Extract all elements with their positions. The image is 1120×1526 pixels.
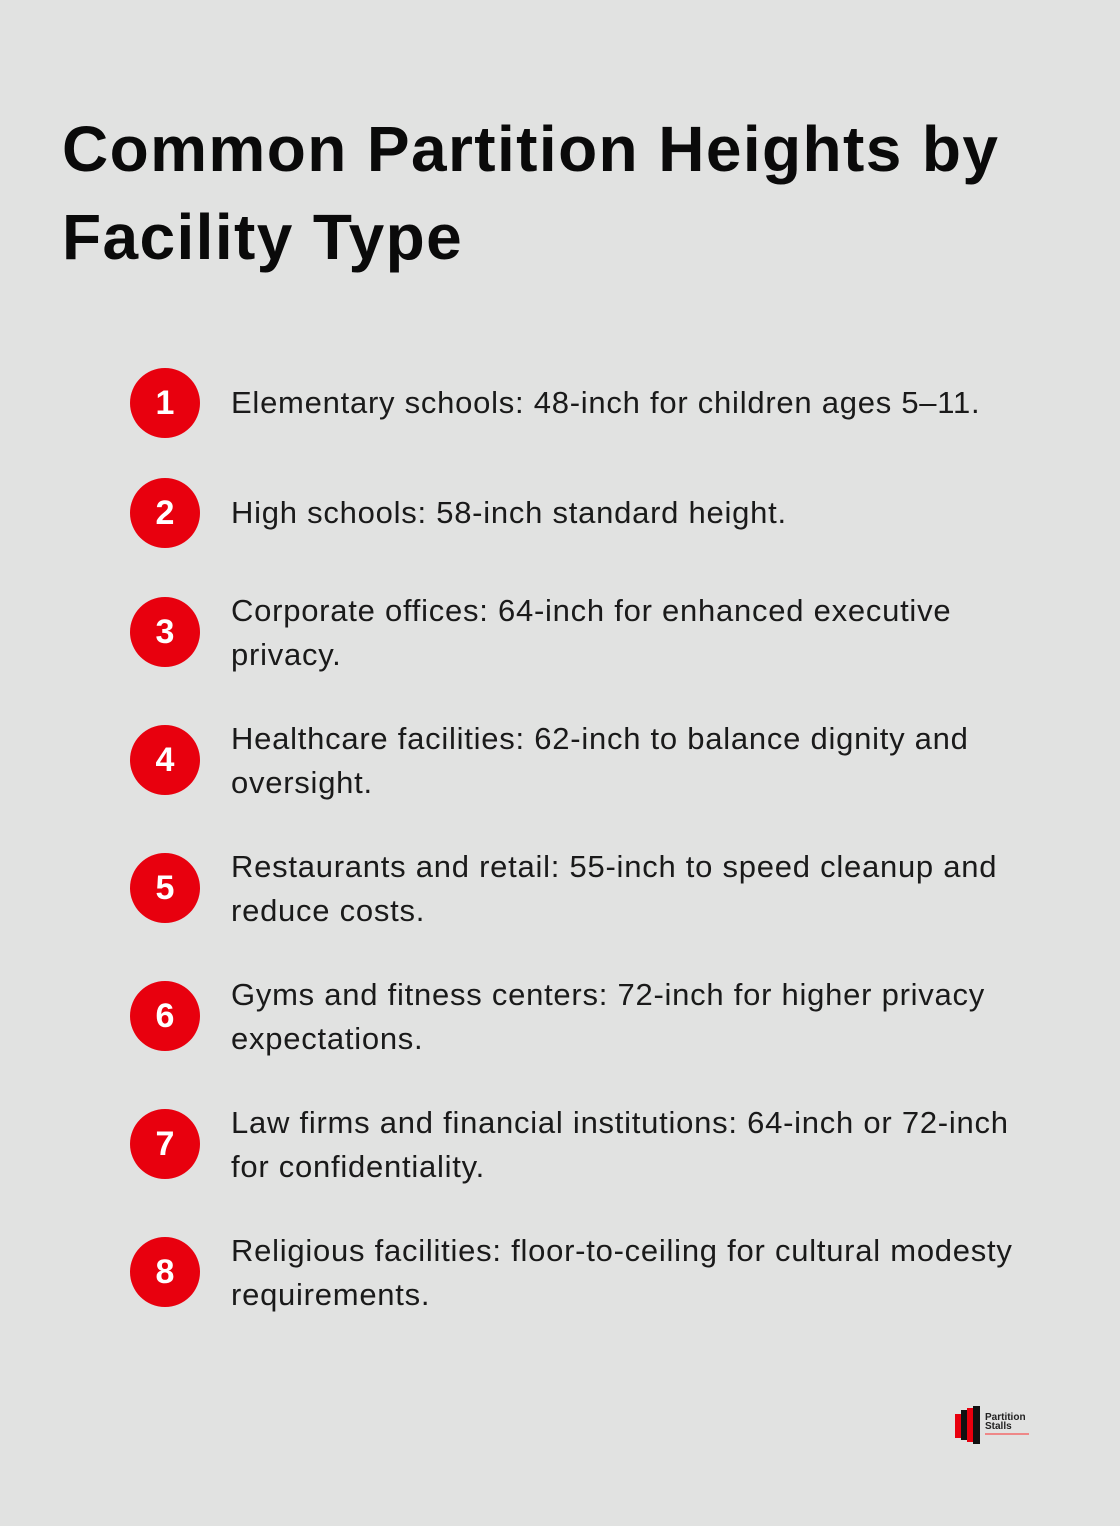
item 4: 4 [156, 741, 174, 779]
item 2: High schools: 58-inch standard height. [231, 495, 787, 530]
item 3: privacy. [231, 637, 342, 672]
item 7: Law firms and financial institutions: 64-inch or 72-inch [231, 1105, 1009, 1140]
item 8 [130, 1233, 1013, 1312]
item 7: 7 [156, 1125, 174, 1163]
item 4 [130, 721, 969, 800]
title: Facility Type [62, 201, 463, 273]
title: Common Partition Heights by [62, 113, 999, 185]
logo [955, 1406, 1029, 1444]
item 5: 5 [156, 869, 174, 907]
item 4: Healthcare facilities: 62-inch to balance dignity and [231, 721, 969, 756]
item 5 [130, 849, 997, 928]
title [62, 113, 999, 273]
item 6: Gyms and fitness centers: 72-inch for higher privacy [231, 977, 985, 1012]
item 3: Corporate offices: 64-inch for enhanced executive [231, 593, 951, 628]
item 4: oversight. [231, 765, 373, 800]
item 6 [130, 977, 985, 1056]
item 2: 2 [156, 494, 174, 532]
item 3: 3 [156, 613, 174, 651]
item 1: Elementary schools: 48-inch for children ages 5–11. [231, 385, 980, 420]
logo: Stalls [985, 1421, 1012, 1432]
item 2 [130, 478, 787, 548]
item 7 [130, 1105, 1009, 1184]
item 6: expectations. [231, 1021, 423, 1056]
item 8: requirements. [231, 1277, 430, 1312]
item 7: for confidentiality. [231, 1149, 485, 1184]
item 3 [130, 593, 951, 672]
item 8: Religious facilities: floor-to-ceiling for cultural modesty [231, 1233, 1013, 1268]
logo: Partition [985, 1412, 1026, 1423]
item 5: reduce costs. [231, 893, 425, 928]
item 6: 6 [156, 997, 174, 1035]
item 1 [130, 368, 980, 438]
item 5: Restaurants and retail: 55-inch to speed cleanup and [231, 849, 997, 884]
item 1: 1 [156, 384, 174, 422]
item 8: 8 [156, 1253, 174, 1291]
